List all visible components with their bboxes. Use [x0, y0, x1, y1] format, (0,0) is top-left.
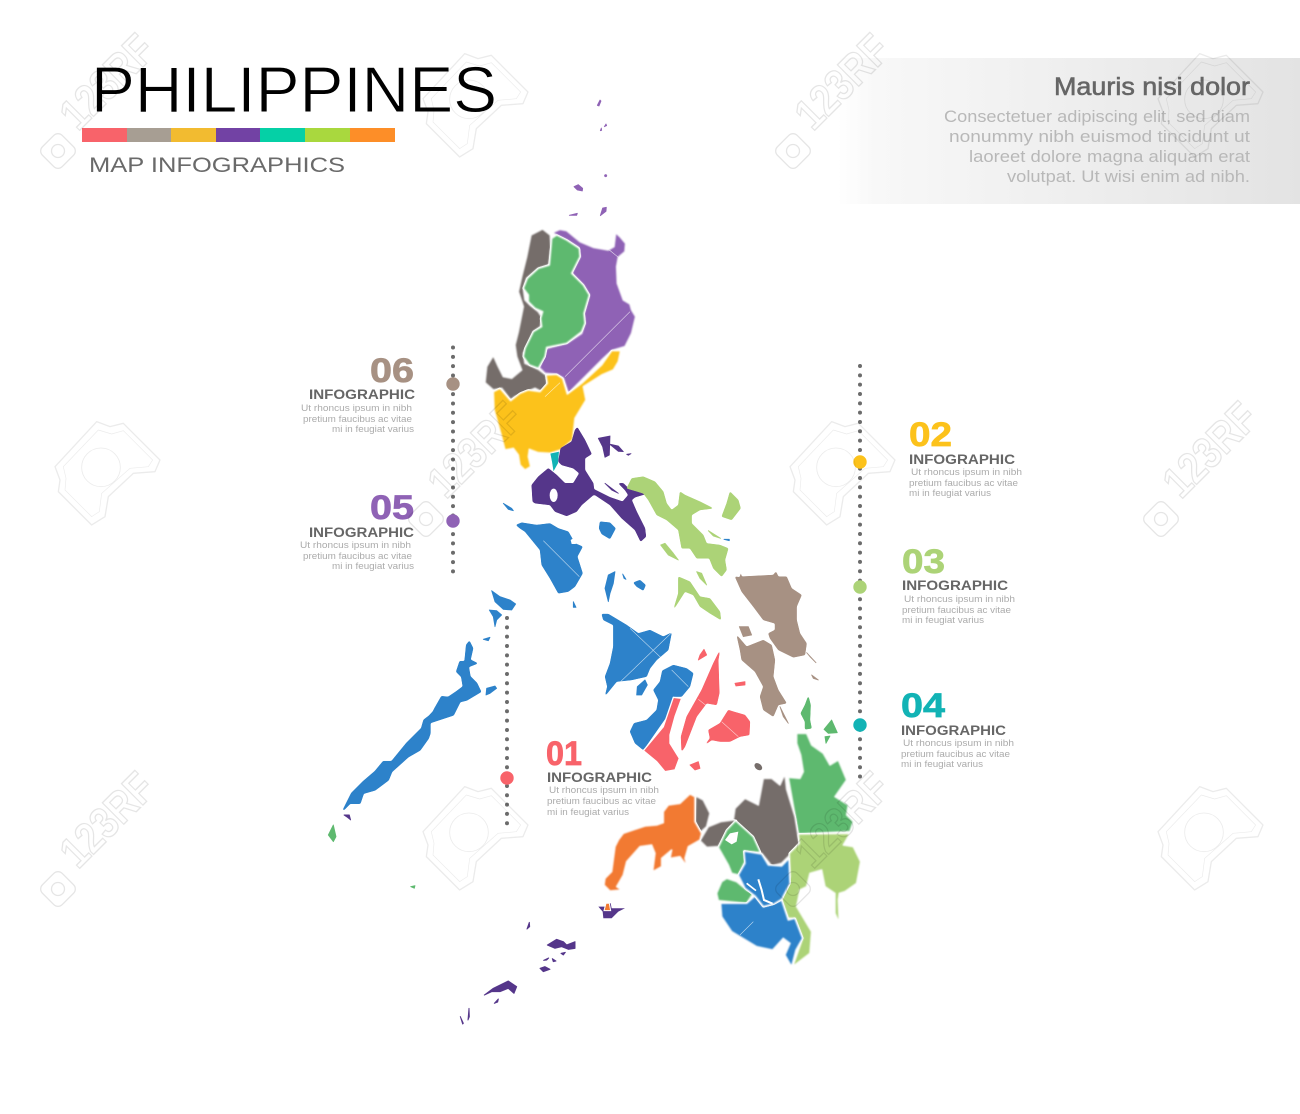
panel heading: Mauris nisi dolor — [1054, 73, 1250, 101]
region: Visayas and Bicol — [503, 477, 818, 772]
region: Metro Manila teal — [550, 451, 559, 472]
region: Basilan — [598, 903, 625, 918]
panel paragraph: volutpat. Ut wisi enim ad nibh. — [1007, 167, 1250, 186]
region: Central Luzon yellow — [493, 351, 621, 470]
colour bar — [82, 128, 395, 142]
region: Polillo islands — [598, 436, 631, 493]
title: PHILIPPINES — [91, 53, 497, 126]
region: Negros Cebu Bohol coral — [643, 649, 750, 772]
item 05 — [300, 489, 414, 571]
region: Samar and Leyte brown — [735, 572, 818, 723]
number 02: 02 — [909, 416, 952, 454]
region: Cagayan purple — [539, 229, 636, 393]
region: Palawan — [328, 591, 516, 888]
panel paragraph — [944, 107, 1250, 186]
region: Zamboanga orange — [604, 794, 702, 891]
item 03 — [902, 543, 1015, 625]
number 04: 04 — [901, 687, 945, 725]
description 06 — [301, 403, 414, 434]
watermark overlay: 123RF — [1153, 393, 1267, 507]
watermark overlay: 123RF — [50, 25, 164, 139]
description 03: mi in feugiat varius — [902, 615, 984, 625]
region: Central Mindanao green — [717, 821, 761, 903]
description 04 — [901, 738, 1014, 769]
region: Davao light green — [782, 833, 861, 967]
item 04 — [901, 687, 1014, 769]
watermark overlay: 123RF — [785, 763, 899, 877]
description 04: pretium faucibus ac vitae — [901, 749, 1010, 759]
watermark overlay: 123RF — [50, 763, 164, 877]
panel: top right text box — [838, 58, 1300, 204]
number 05: 05 — [370, 489, 414, 527]
description 02: pretium faucibus ac vitae — [909, 478, 1018, 488]
heading 06: INFOGRAPHIC — [309, 387, 415, 402]
subtitle: MAP INFOGRAPHICS — [89, 154, 345, 177]
description 03 — [902, 594, 1015, 625]
description 05 — [300, 540, 414, 571]
description 05: Ut rhoncus ipsum in nibh — [300, 540, 411, 550]
region: Calabarzon dark purple — [532, 427, 648, 542]
dotted leader: left — [446, 348, 460, 578]
description 06: Ut rhoncus ipsum in nibh — [301, 403, 412, 413]
panel paragraph: Consectetuer adipiscing elit, sed diam — [944, 107, 1250, 126]
heading 05: INFOGRAPHIC — [309, 525, 414, 540]
number 06: 06 — [370, 352, 414, 390]
heading 03: INFOGRAPHIC — [902, 578, 1008, 593]
item 02 — [909, 416, 1022, 498]
item 06 — [301, 352, 415, 434]
description 04: mi in feugiat varius — [901, 759, 983, 769]
item 01 — [546, 735, 659, 817]
heading 02: INFOGRAPHIC — [909, 452, 1015, 467]
description 01: Ut rhoncus ipsum in nibh — [549, 785, 659, 795]
watermark overlay: 123RF — [785, 25, 899, 139]
description 03: Ut rhoncus ipsum in nibh — [904, 594, 1015, 604]
description 02: Ut rhoncus ipsum in nibh — [911, 467, 1022, 477]
region: Mindoro and Panay blue — [503, 503, 729, 750]
region: Cotabato blue — [721, 851, 803, 967]
description 01: pretium faucibus ac vitae — [547, 796, 656, 806]
region: Northern Luzon — [485, 229, 648, 542]
region: Batanes islands — [569, 100, 607, 216]
description 04: Ut rhoncus ipsum in nibh — [903, 738, 1014, 748]
map: Philippines — [328, 100, 861, 1024]
region: Ilocos gray — [485, 229, 551, 400]
dotted leader: right — [853, 366, 867, 782]
description 03: pretium faucibus ac vitae — [902, 605, 1011, 615]
region: Caraga green — [788, 696, 853, 834]
description 06: mi in feugiat varius — [332, 424, 414, 434]
region: Cordillera green — [523, 235, 589, 368]
number 03: 03 — [902, 543, 945, 581]
heading 04: INFOGRAPHIC — [901, 723, 1006, 738]
dotted leader: center — [500, 618, 514, 826]
number 01: 01 — [546, 735, 582, 773]
panel paragraph: nonummy nibh euismod tincidunt ut — [949, 127, 1250, 146]
description 02: mi in feugiat varius — [909, 488, 991, 498]
description 05: mi in feugiat varius — [332, 561, 414, 571]
description 02 — [909, 467, 1022, 498]
region: Bicol light green — [627, 477, 741, 620]
description 06: pretium faucibus ac vitae — [303, 414, 412, 424]
region: Northern Mindanao gray — [695, 762, 799, 866]
region: Mindanao — [598, 696, 861, 967]
watermark overlay — [38, 25, 1267, 909]
description 01: mi in feugiat varius — [547, 807, 629, 817]
region: Sulu archipelago — [460, 922, 575, 1024]
heading 01: INFOGRAPHIC — [547, 770, 652, 785]
description 05: pretium faucibus ac vitae — [303, 551, 412, 561]
watermark overlay: 123RF — [418, 393, 532, 507]
panel paragraph: laoreet dolore magna aliquam erat — [969, 147, 1250, 166]
description 01 — [547, 785, 659, 817]
